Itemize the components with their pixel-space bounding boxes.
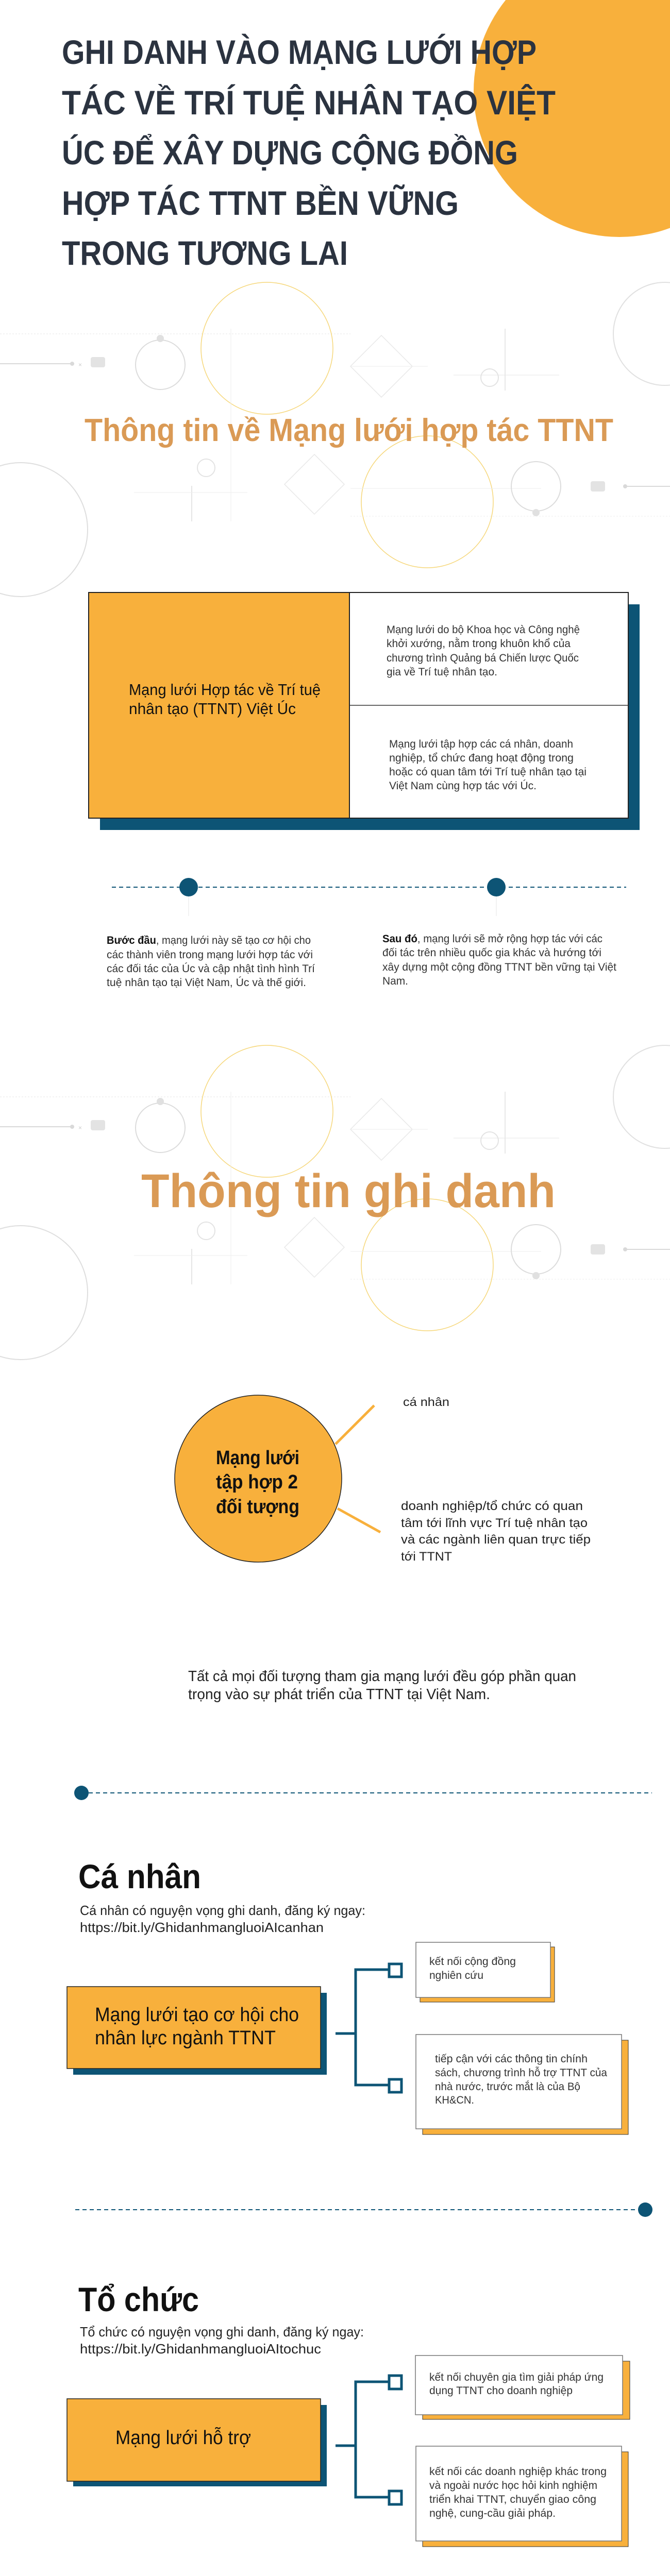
connector bracket <box>336 1964 401 2092</box>
text: everyone contributes <box>188 1668 576 1703</box>
text: members: hoặc có quan tâm tới Trí tuệ nhân tạo tại <box>389 766 587 778</box>
title: TRONG TƯƠNG LAI <box>62 234 348 272</box>
benefit box 2: KH&CN. <box>435 2094 474 2106</box>
text: everyone contributes: Tất cả mọi đối tượng tham gia mạng lưới đều góp phần quan <box>188 1668 576 1685</box>
text: members <box>389 738 587 792</box>
benefit box 2: triển khai TTNT, chuyển giao công <box>429 2494 596 2505</box>
main box <box>67 2399 327 2486</box>
label: organisations <box>401 1499 591 1564</box>
benefit box 2 <box>416 2035 628 2134</box>
text: origin: Mạng lưới do bộ Khoa học và Công nghệ <box>387 624 580 636</box>
central circle: đối tượng <box>216 1496 299 1518</box>
label: organisations: doanh nghiệp/tổ chức có quan <box>401 1499 583 1513</box>
heading: Thông tin về Mạng lưới hợp tác TTNT: Thông tin về Mạng lưới hợp tác TTNT <box>85 413 613 448</box>
text: later phase: xây dựng một cộng đồng TTNT bền vững tại Việt <box>382 961 616 973</box>
decorative circle top right <box>474 0 670 237</box>
text: later phase: Nam. <box>382 975 408 987</box>
text: members: Việt Nam cùng hợp tác với Úc. <box>389 780 537 792</box>
label: organisations: tâm tới lĩnh vực Trí tuệ nhân tạo <box>401 1516 588 1530</box>
label: individuals: cá nhân <box>403 1395 449 1409</box>
benefit box 2: nghệ, cung-cầu giải pháp. <box>429 2507 556 2519</box>
benefit box 2 <box>416 2446 628 2547</box>
box title <box>129 681 321 718</box>
text: members: nghiệp, tổ chức đang hoạt động trong <box>389 752 574 764</box>
heading: Thông tin ghi danh: Thông tin ghi danh <box>141 1165 556 1217</box>
title: ÚC ĐỂ XÂY DỰNG CỘNG ĐỒNG <box>62 133 518 172</box>
divider 1 <box>74 1786 652 1800</box>
text: everyone contributes: trọng vào sự phát triển của TTNT tại Việt Nam. <box>188 1686 490 1703</box>
text: later phase: Sau đó, mạng lưới sẽ mở rộng hợp tác với các <box>382 933 602 945</box>
registration text: Cá nhân có nguyện vọng ghi danh, đăng ký ngay: <box>80 1903 365 1918</box>
text: first phase <box>107 935 315 989</box>
text: origin: gia về Trí tuệ nhân tạo. <box>387 666 497 678</box>
registration text <box>80 2324 364 2357</box>
benefit box 1 <box>416 1942 555 2002</box>
title <box>62 33 556 272</box>
divider 2 <box>75 2202 652 2217</box>
text: members: Mạng lưới tập hợp các cá nhân, doanh <box>389 738 573 750</box>
panel: network info box <box>89 592 640 830</box>
benefit box 1: nghiên cứu <box>429 1970 483 1981</box>
central circle: Mạng lưới <box>216 1447 299 1469</box>
text: origin: chương trình Quảng bá Chiến lược Quốc <box>387 652 579 664</box>
text: first phase: các thành viên trong mạng lưới hợp tác với <box>107 949 313 961</box>
text: later phase <box>382 933 616 987</box>
section: Cá nhân <box>67 1857 628 2134</box>
connector bracket <box>336 2376 401 2504</box>
timeline dot 2 <box>487 878 506 896</box>
benefit box 1: kết nối chuyên gia tìm giải pháp ứng <box>429 2371 604 2383</box>
connector lines <box>336 1405 380 1532</box>
registration text: https://bit.ly/GhidanhmangluoiAItochuc <box>80 2341 321 2357</box>
heading: Tổ chức <box>78 2280 199 2318</box>
main box: Mạng lưới hỗ trợ <box>115 2427 251 2449</box>
central circle <box>175 1395 342 1562</box>
label: organisations: tới TTNT <box>401 1550 452 1564</box>
title: GHI DANH VÀO MẠNG LƯỚI HỢP <box>62 33 537 71</box>
benefit box 2: tiếp cận với các thông tin chính <box>435 2053 588 2065</box>
registration text <box>80 1903 365 1935</box>
benefit box 2: và ngoài nước học hỏi kinh nghiệm <box>429 2480 597 2492</box>
title: TÁC VỀ TRÍ TUỆ NHÂN TẠO VIỆT <box>62 83 556 122</box>
text: later phase: đối tác trên nhiều quốc gia khác và hướng tới <box>382 947 601 959</box>
text: first phase: các đối tác của Úc và cập nhật tình hình Trí <box>107 963 315 975</box>
diagram: two member types <box>175 1395 591 1564</box>
section: Tổ chức <box>67 2280 630 2547</box>
timeline dot 1 <box>179 878 198 896</box>
central circle: tập hợp 2 <box>216 1471 298 1493</box>
main box <box>67 1987 327 2075</box>
text: first phase: tuệ nhân tạo tại Việt Nam, Úc và thế giới. <box>107 977 306 989</box>
text: origin <box>387 624 580 678</box>
main box: nhân lực ngành TTNT <box>95 2027 276 2049</box>
benefit box 1: kết nối cộng đồng <box>429 1956 516 1968</box>
background pattern band 2 <box>0 1045 670 1360</box>
benefit box 2: nhà nước, trước mắt là của Bộ <box>435 2081 580 2093</box>
box title: nhân tạo (TTNT) Việt Úc <box>129 700 296 718</box>
title: HỢP TÁC TTNT BỀN VỮNG <box>62 184 459 222</box>
benefit box 1: dụng TTNT cho doanh nghiệp <box>429 2385 573 2397</box>
text: first phase: Bước đầu, mạng lưới này sẽ tạo cơ hội cho <box>107 935 311 946</box>
box title: Mạng lưới Hợp tác về Trí tuệ <box>129 681 321 699</box>
text: origin: khởi xướng, nằm trong khuôn khổ của <box>387 638 571 650</box>
timeline <box>112 878 626 916</box>
registration text: Tổ chức có nguyện vọng ghi danh, đăng ký ngay: <box>80 2324 364 2340</box>
main box: Mạng lưới tạo cơ hội cho <box>95 2004 299 2026</box>
benefit box 2: sách, chương trình hỗ trợ TTNT của <box>435 2067 607 2079</box>
benefit box 2: kết nối các doanh nghiệp khác trong <box>429 2466 607 2478</box>
label: organisations: và các ngành liên quan trực tiếp <box>401 1533 591 1547</box>
registration text: https://bit.ly/GhidanhmangluoiAIcanhan <box>80 1920 324 1935</box>
heading: Cá nhân <box>78 1857 201 1895</box>
benefit box 1 <box>415 2355 630 2419</box>
background pattern band 1 <box>0 282 670 597</box>
